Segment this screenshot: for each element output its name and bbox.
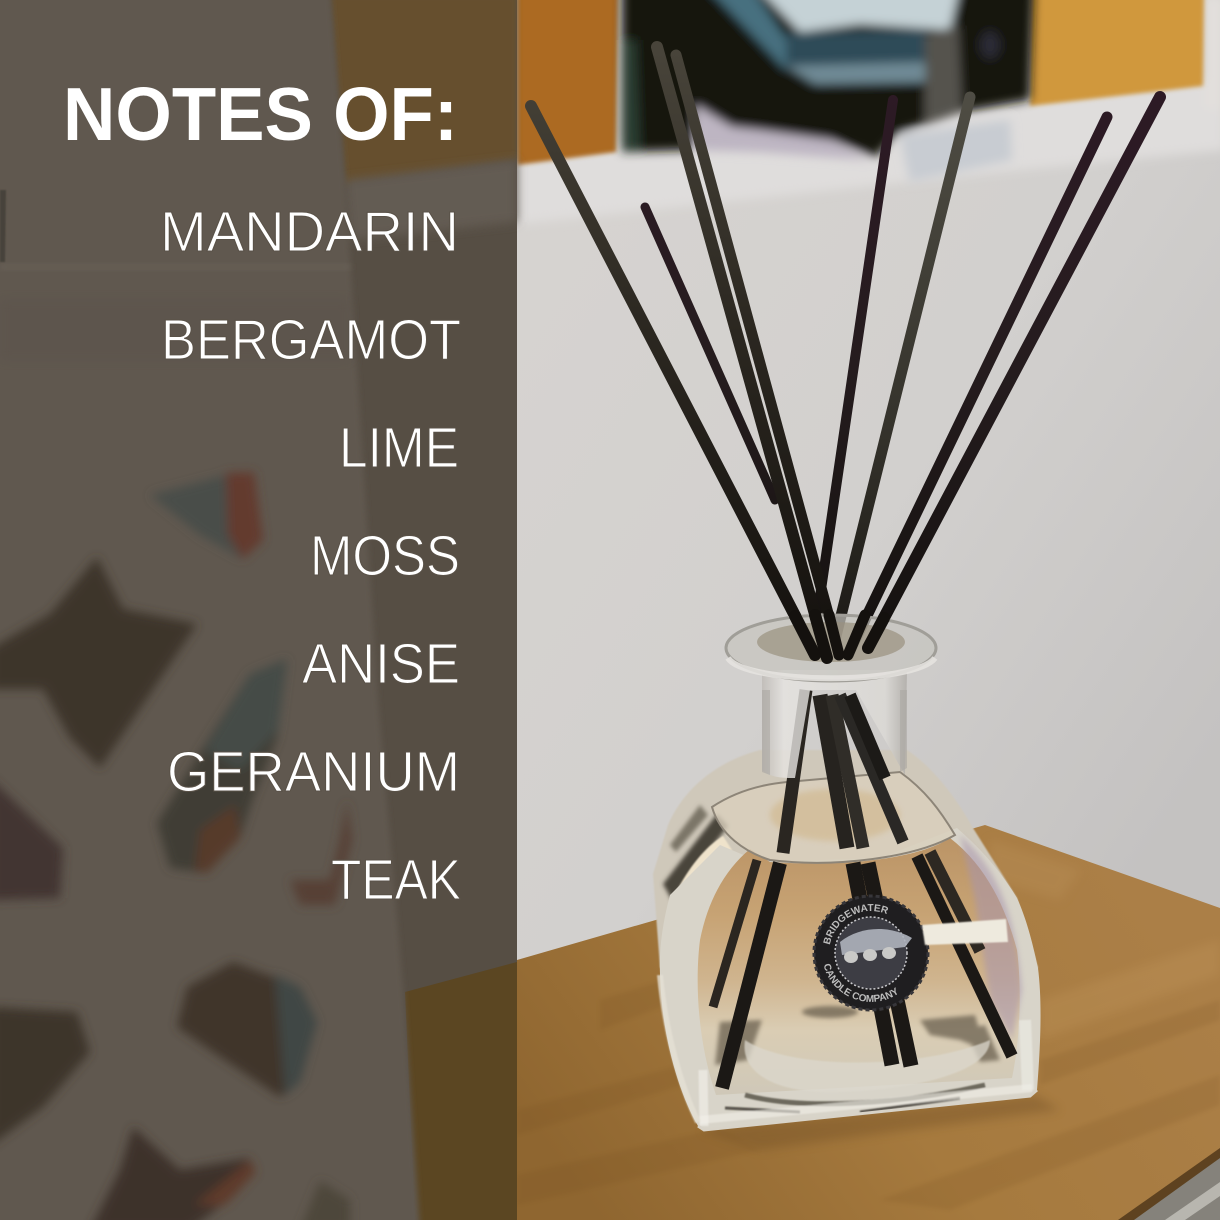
note: mandarin: MANDARIN [160,200,459,264]
rear glass shoulder [653,750,1038,968]
rear reeds [531,47,1160,655]
reed: dark purple centre [818,100,893,610]
vase cut-out shapes [0,472,352,1220]
reed: far right [868,97,1160,648]
reed: far left [531,106,805,635]
wooden table [517,825,1220,1220]
shoulder glass [712,772,955,863]
wood grain [517,975,1220,1210]
reed: tall left [657,47,825,650]
note: moss: MOSS [310,524,460,588]
note: geranium: GERANIUM [167,740,460,804]
panel: dark overlay with blurred vase [0,0,517,1220]
vase rim shading [0,264,350,270]
blurred vase body [0,0,420,1220]
diffuser bottle [653,610,1041,1132]
reeds in neck and shoulder [783,690,903,853]
shelf under overlay [345,160,517,240]
bottom glass reflections [660,975,1032,1126]
reed: right [848,117,1107,655]
note: lime: LIME [339,416,459,480]
seal lettering: BRIDGEWATER [823,904,888,944]
seal badge [812,894,930,1012]
photo background: wall, shelf and artwork [510,0,1220,1000]
note: teak: TEAK [331,848,461,912]
reed: purple back [645,207,775,500]
heading: notes of: NOTES OF: [63,72,458,156]
table under overlay [405,962,517,1220]
reed: tall left second [676,55,838,650]
orange artwork left [517,0,618,165]
reed: grey centre-right [835,97,970,640]
dark artwork [622,0,1034,182]
seal badge: CANDLE COMPANY [824,964,897,1002]
orange background under overlay [330,0,517,185]
reeds entering rim [795,615,884,658]
bottle rim [726,615,936,681]
bottle body [660,828,1041,1130]
shelf [510,0,1220,225]
bottle neck [762,670,907,778]
glass highlight [922,919,1008,945]
note: anise: ANISE [302,632,460,696]
list of scent notes [160,200,461,912]
yellow artwork right [1030,0,1204,106]
liquid [698,838,1020,1095]
table front edge [1130,1156,1220,1220]
bottle shadow on table [700,1095,1060,1150]
note: bergamot: BERGAMOT [161,308,461,372]
reeds inside bottle [713,852,1012,1088]
